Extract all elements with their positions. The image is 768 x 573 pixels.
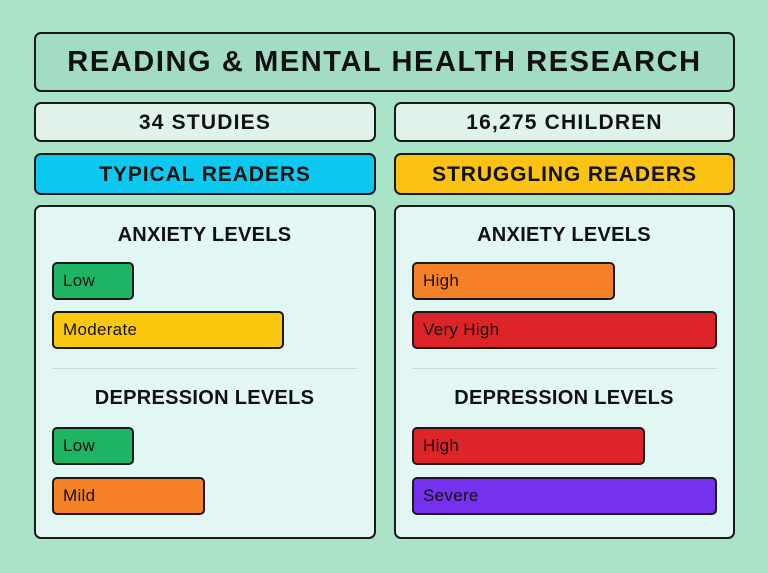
bar: high depression: High [423, 436, 459, 455]
stat: studies [34, 102, 376, 142]
bar: moderate anxiety [52, 311, 284, 349]
bar: low depression [52, 427, 134, 465]
bar: very high anxiety [412, 311, 717, 349]
bar: severe depression [412, 477, 717, 515]
bar: moderate anxiety: Moderate [63, 320, 137, 339]
panel: typical readers [34, 205, 376, 539]
heading: anxiety: ANXIETY LEVELS [477, 224, 651, 246]
heading: depression: DEPRESSION LEVELS [454, 387, 674, 409]
bar: high depression [412, 427, 645, 465]
bar: mild depression [52, 477, 205, 515]
heading: anxiety: ANXIETY LEVELS [118, 224, 291, 246]
header: struggling readers: STRUGGLING READERS [432, 163, 697, 186]
heading: depression: DEPRESSION LEVELS [95, 387, 314, 409]
header: struggling readers [394, 153, 735, 195]
title [34, 32, 735, 92]
title: READING & MENTAL HEALTH RESEARCH [67, 46, 702, 78]
stat: children [394, 102, 735, 142]
header: typical readers: TYPICAL READERS [99, 163, 311, 186]
bar: low anxiety [52, 262, 134, 300]
header: typical readers [34, 153, 376, 195]
bar: high anxiety: High [423, 271, 459, 290]
bar: severe depression: Severe [423, 486, 479, 505]
bar: low depression: Low [63, 436, 95, 455]
stat: studies: 34 STUDIES [139, 111, 271, 134]
bar: low anxiety: Low [63, 271, 95, 290]
stat: children: 16,275 CHILDREN [466, 111, 663, 134]
panel: struggling readers [394, 205, 735, 539]
bar: mild depression: Mild [63, 486, 95, 505]
bar: very high anxiety: Very High [423, 320, 499, 339]
bar: high anxiety [412, 262, 615, 300]
